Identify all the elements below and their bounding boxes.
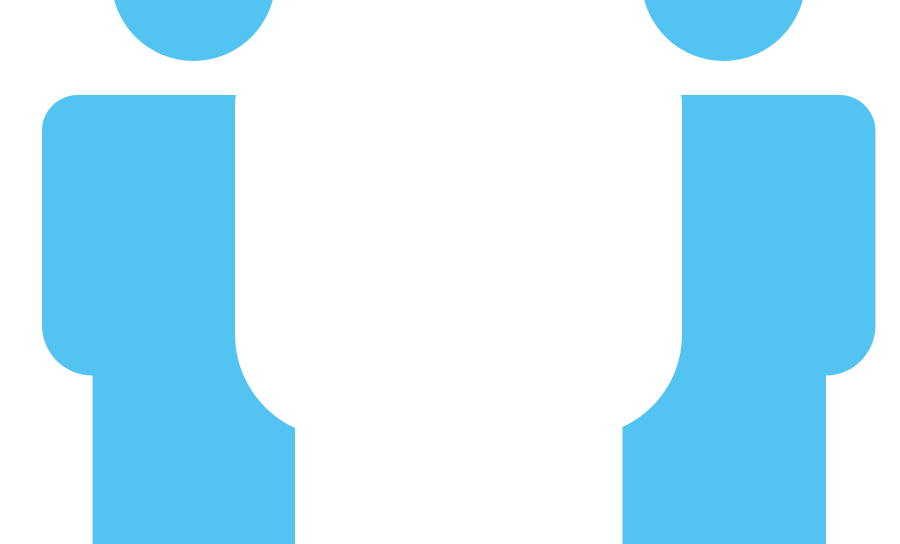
right person body bbox=[622, 95, 876, 544]
icon: left person bbox=[42, 0, 295, 544]
icon: right person bbox=[622, 0, 876, 544]
right person head bbox=[642, 0, 806, 61]
left person body bbox=[42, 95, 295, 544]
left person head bbox=[112, 0, 276, 61]
